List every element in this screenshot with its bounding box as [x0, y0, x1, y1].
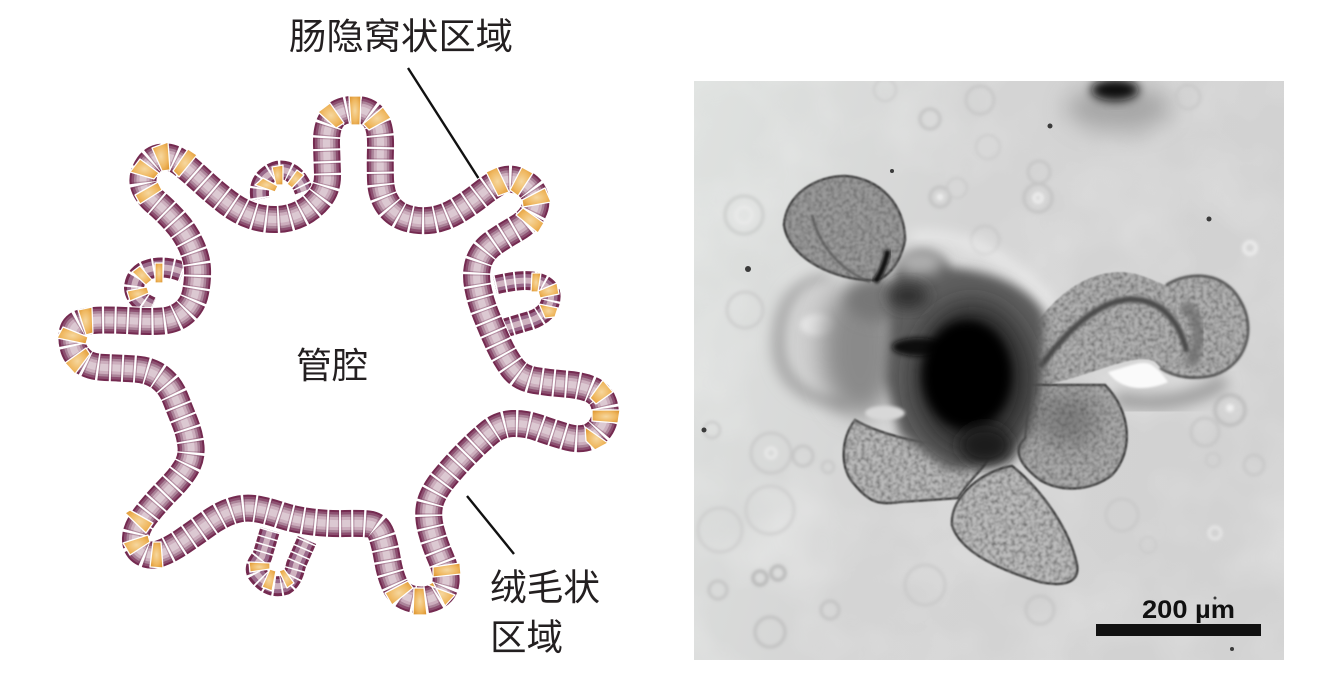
organoid	[780, 176, 1248, 584]
small crypt: top	[259, 170, 304, 199]
villus domain label: 区域	[490, 617, 563, 658]
top-left lobe	[784, 176, 905, 282]
orange cells at crypt tips	[57, 96, 620, 615]
villus domain label: 绒毛状	[490, 567, 600, 608]
bottom lobe	[952, 466, 1077, 584]
scale bar: 200 µm	[1142, 596, 1235, 624]
diagram: epithelial ring	[57, 96, 620, 615]
lower-right lobe	[1019, 385, 1127, 488]
out-of-focus bubbles	[698, 79, 1264, 647]
photo background	[694, 79, 1284, 660]
debris specks	[702, 124, 1234, 651]
small crypt: bottom	[256, 530, 307, 586]
small crypt: left	[134, 268, 183, 307]
leader line: crypt domain	[408, 68, 479, 179]
dark central mass	[822, 249, 1045, 470]
small crypt: right	[495, 281, 551, 328]
right arm lobes	[1030, 272, 1248, 388]
halo and pale budding lobe	[780, 237, 1225, 405]
villus domain label	[490, 567, 600, 658]
title: crypt domain label: 肠隐窝状区域	[289, 16, 513, 57]
leader line: villus domain	[467, 496, 514, 554]
main epithelial band	[72, 109, 605, 600]
lower-left lobe	[844, 420, 990, 503]
scale bar	[1096, 596, 1261, 636]
panel: organoid micrograph	[694, 79, 1284, 660]
lumen label: 管腔	[296, 345, 368, 386]
